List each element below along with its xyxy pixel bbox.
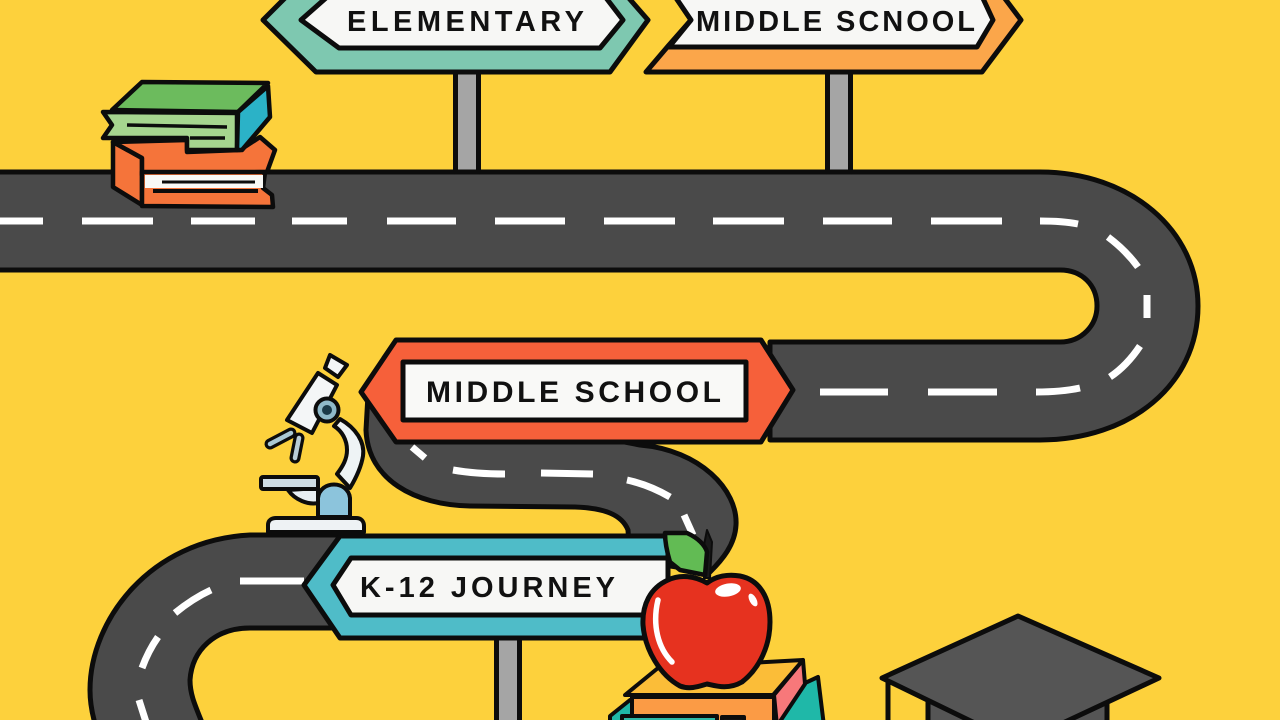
- sign: K-12 journey: [304, 536, 668, 638]
- top winding road: [0, 172, 1198, 440]
- icon: apple: [643, 530, 770, 688]
- lower curving road: [366, 395, 736, 572]
- post: K-12 sign: [496, 638, 520, 720]
- post: elementary sign: [456, 70, 478, 172]
- sign: elementary: [263, 0, 648, 72]
- sign text: middle school: MIDDLE SCHOOL: [426, 376, 721, 409]
- icon: microscope: [261, 355, 364, 532]
- icon: graduation cap: [882, 616, 1159, 720]
- icon: stacked books on road: [103, 82, 275, 207]
- sign: red middle school: [361, 340, 793, 442]
- icon: books under apple: [610, 660, 824, 720]
- bottom left road: [90, 535, 345, 720]
- post: middle school sign: [828, 70, 850, 172]
- sign text: K-12 journey: K-12 JOURNEY: [360, 572, 615, 604]
- sign: orange middle school (top): [646, 0, 1021, 72]
- sign text: middle school top: MIDDLE SCNOOL: [696, 6, 975, 38]
- sign text: elementary: ELEMENTARY: [347, 6, 584, 38]
